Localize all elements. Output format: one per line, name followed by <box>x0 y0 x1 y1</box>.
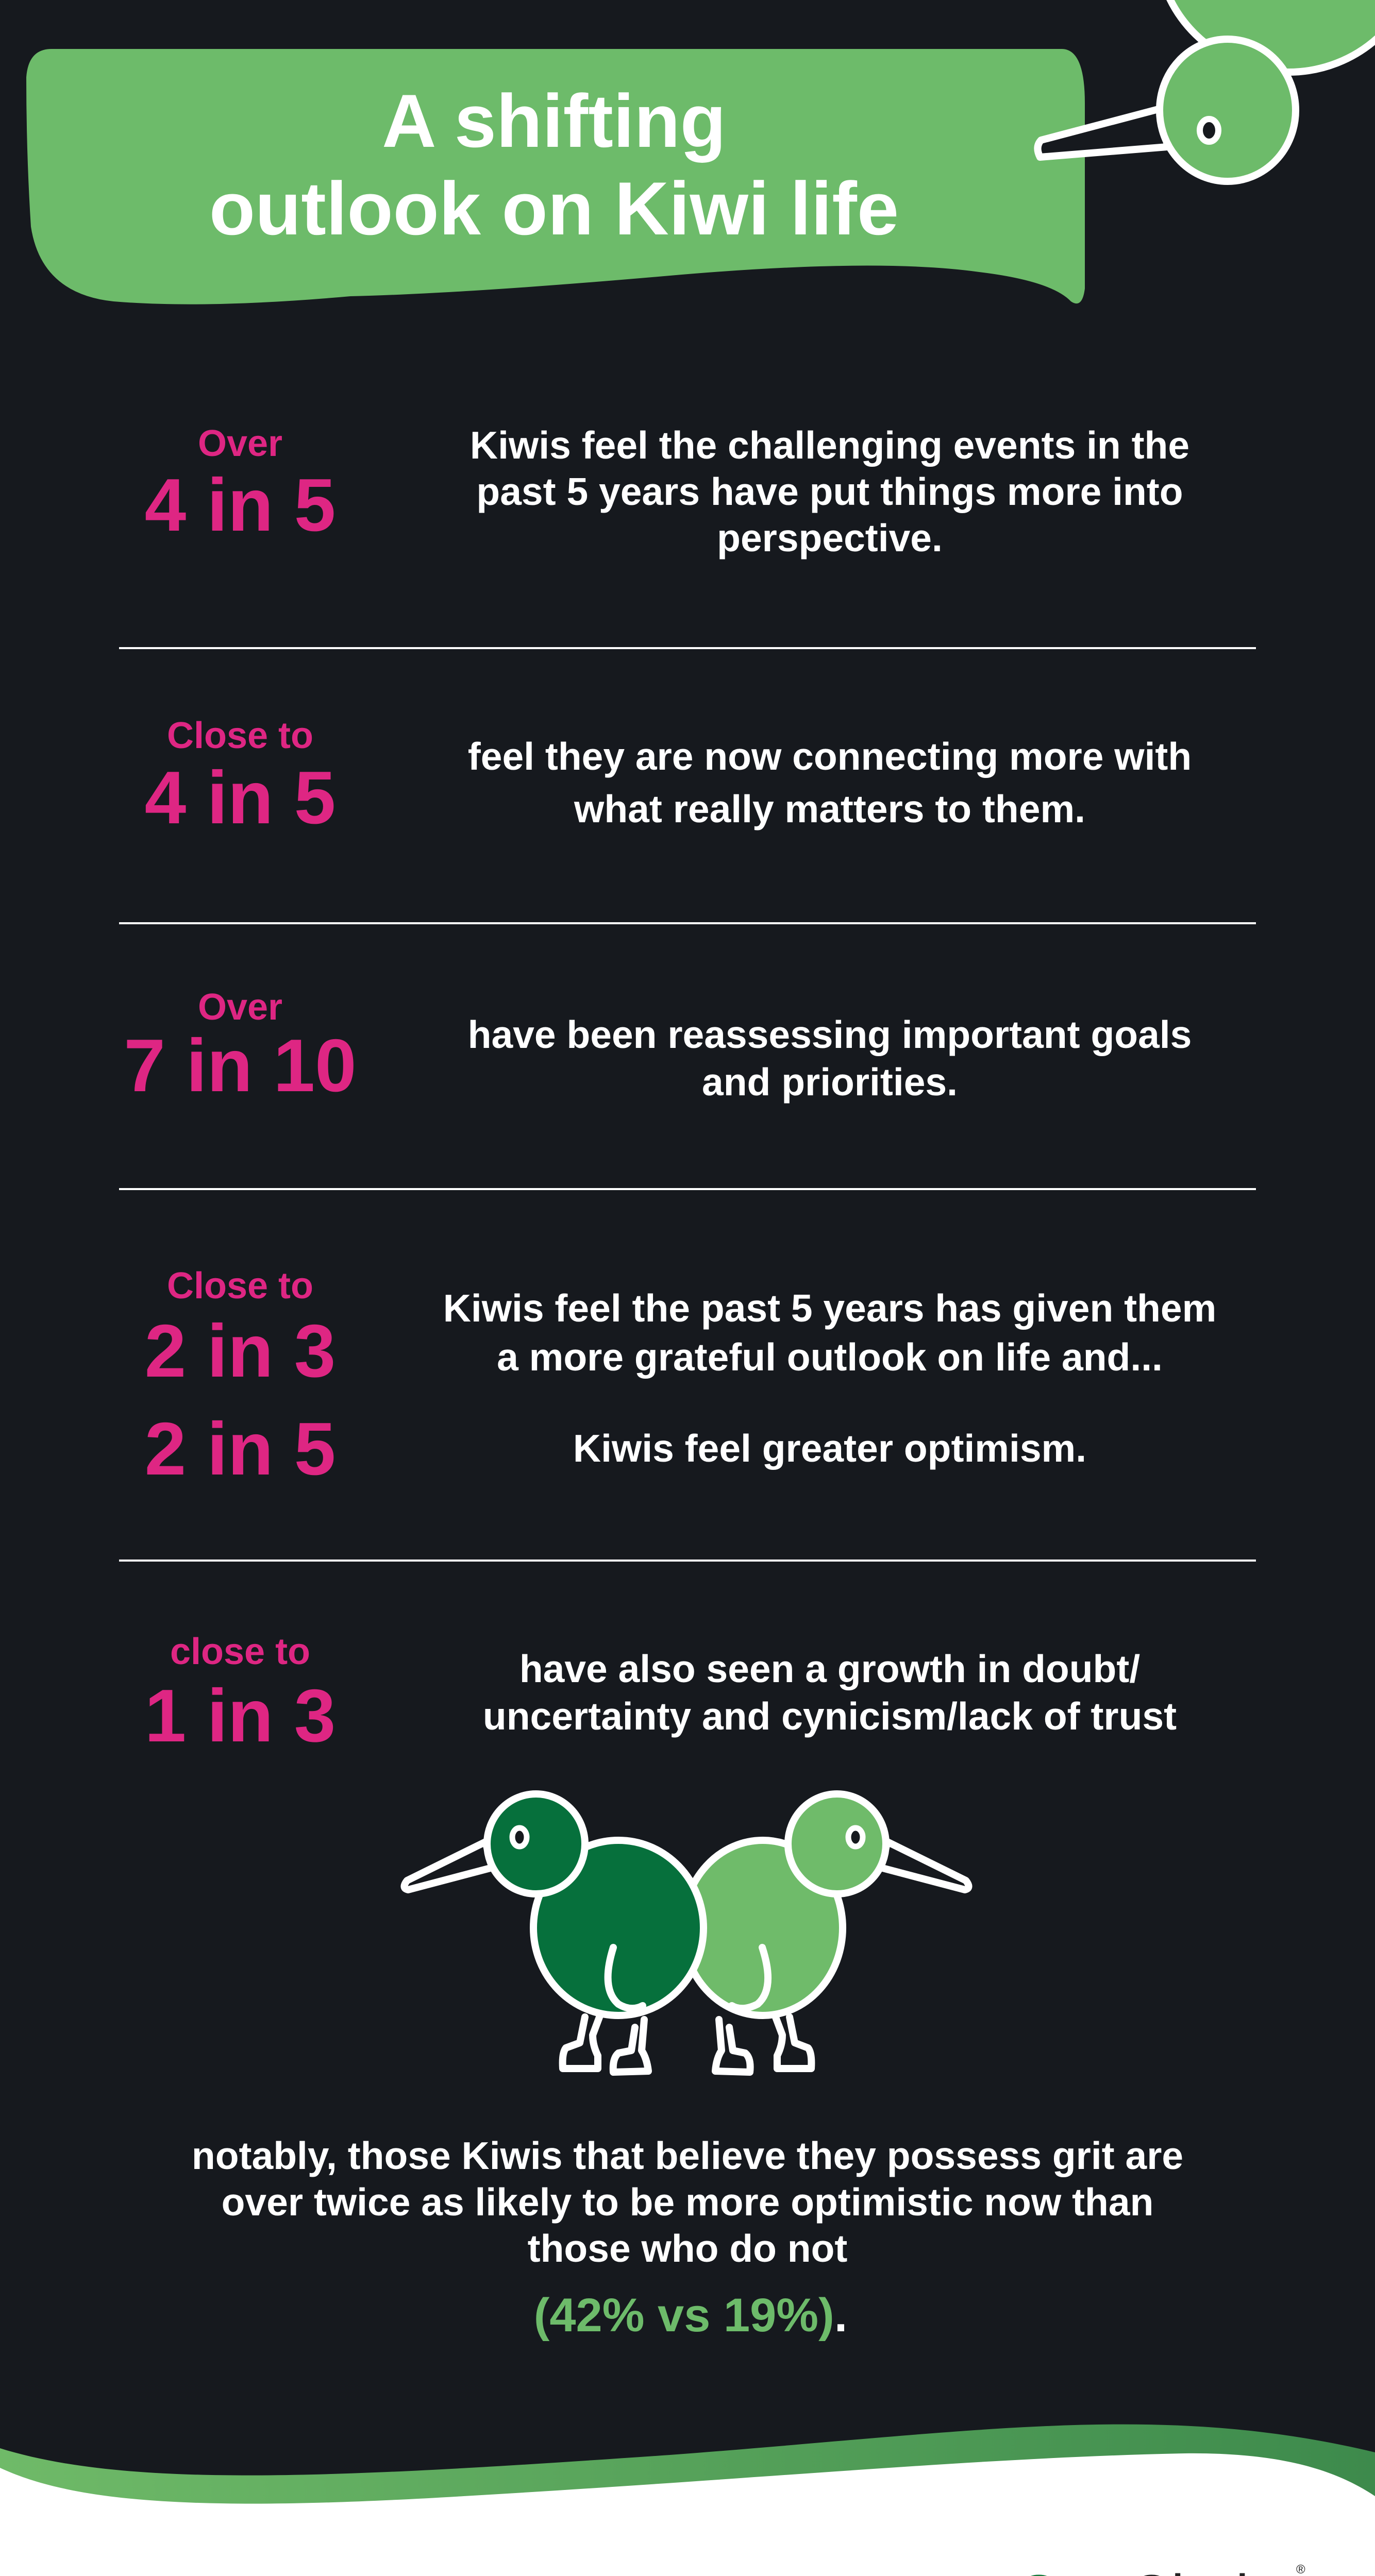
row 5 <box>145 1631 1177 1757</box>
row 3 <box>124 987 1192 1107</box>
conclusion text: notably, those Kiwis that believe they possess grit are <box>192 2134 1183 2177</box>
beaks <box>404 1842 492 1890</box>
row 1: 4 in 5 <box>145 463 336 547</box>
row 1: Kiwis feel the challenging events in the <box>470 423 1189 467</box>
row 4: 2 in 3 <box>145 1309 336 1393</box>
row 3: have been reassessing important goals <box>468 1013 1192 1056</box>
row 4 <box>145 1265 1216 1490</box>
row 2 <box>145 715 1192 839</box>
row 2: feel they are now connecting more with <box>468 735 1192 778</box>
title: outlook on Kiwi life <box>209 166 899 250</box>
conclusion text: over twice as likely to be more optimistic now than <box>222 2180 1153 2224</box>
row 4: Kiwis feel the past 5 years has given them <box>443 1286 1216 1330</box>
row 5: have also seen a growth in doubt/ <box>519 1647 1140 1690</box>
left body <box>533 1840 703 2015</box>
row 3: and priorities. <box>702 1060 958 1104</box>
title <box>209 79 899 250</box>
row 1 <box>145 423 1189 560</box>
row 5: close to <box>170 1631 310 1672</box>
legs <box>563 2014 811 2072</box>
row 5: 1 in 3 <box>145 1674 336 1757</box>
row 1: perspective. <box>717 516 943 560</box>
title: A shifting <box>382 79 726 163</box>
row 4: Close to <box>167 1265 313 1307</box>
conclusion text: those who do not <box>528 2227 847 2270</box>
row 1: past 5 years have put things more into <box>476 470 1183 513</box>
heads <box>487 1794 585 1894</box>
row 4: 2 in 5 <box>145 1407 336 1490</box>
conclusion text: (42% vs 19%). <box>534 2289 847 2342</box>
header banner <box>26 49 1085 304</box>
icon: kiwi peeking top right <box>1037 0 1375 181</box>
row 5: uncertainty and cynicism/lack of trust <box>483 1694 1177 1738</box>
footer wave <box>0 2425 1375 2576</box>
icon: two kiwis <box>404 1794 969 2072</box>
conclusion text <box>192 2134 1183 2342</box>
row 2: Close to <box>167 715 313 756</box>
row 4: a more grateful outlook on life and... <box>497 1335 1163 1379</box>
row 1: Over <box>198 423 282 464</box>
row 3: 7 in 10 <box>124 1024 357 1107</box>
row 2: 4 in 5 <box>145 756 336 839</box>
row 3: Over <box>198 987 282 1028</box>
right body <box>683 1840 843 2015</box>
row 2: what really matters to them. <box>574 787 1085 831</box>
row 4: Kiwis feel greater optimism. <box>573 1427 1086 1470</box>
